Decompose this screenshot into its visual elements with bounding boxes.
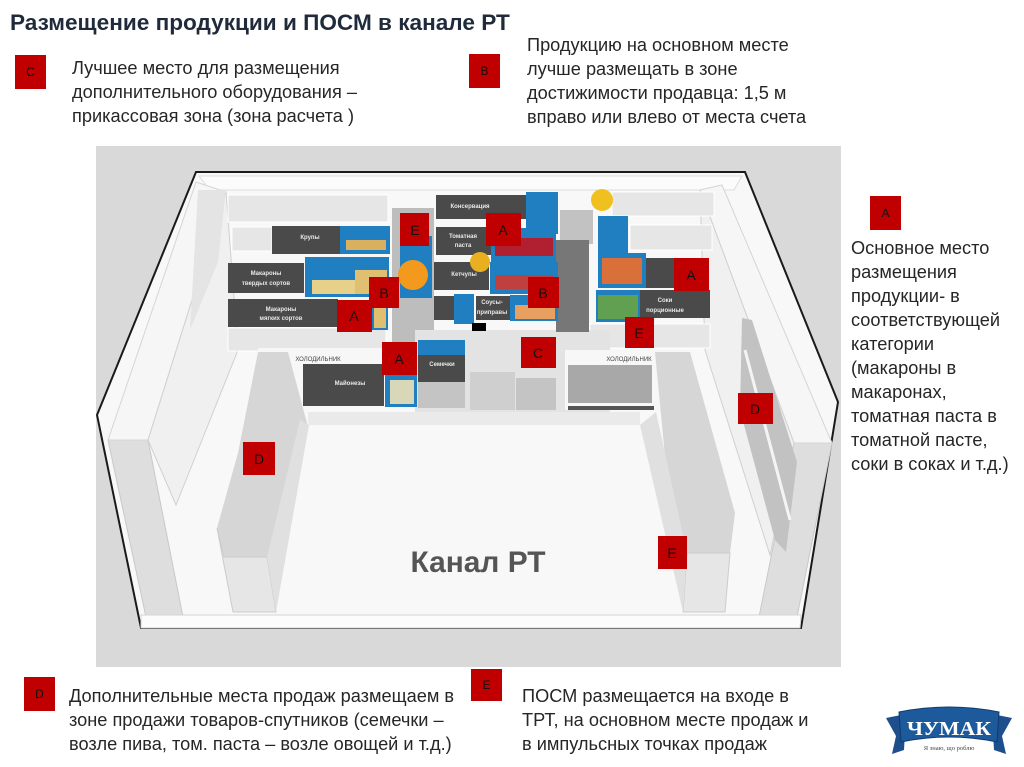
text block: A: томатная паста в: [851, 406, 997, 426]
room floor: [97, 172, 838, 628]
grey backdrop: [96, 146, 841, 667]
legend badge C: C: [26, 65, 35, 79]
text block: B: достижимости продавца: 1,5 м: [527, 83, 786, 103]
blue product displays: [305, 192, 646, 407]
text block: E: в импульсных точках продаж: [522, 734, 767, 754]
text block: C: [72, 58, 357, 126]
shelf labels: Консервация: [450, 204, 490, 210]
zone markers: D: [750, 401, 760, 417]
dark category shelves: [228, 195, 710, 406]
shelf labels: Макароны: [251, 271, 281, 277]
shelf labels: Соусы-: [481, 300, 503, 306]
gondola end units: [217, 352, 735, 612]
product colours on displays: [312, 189, 642, 404]
text block: B: [527, 35, 806, 127]
shelf labels: Кетчупы: [451, 272, 477, 278]
text block: E: ПОСМ размещается на входе в: [522, 686, 789, 706]
zone markers: A: [498, 222, 508, 238]
text block: A: [851, 238, 1009, 474]
text block: B: вправо или влево от места счета: [527, 107, 806, 127]
zone markers: C: [533, 345, 543, 361]
text block: C: прикассовая зона (зона расчета ): [72, 106, 354, 126]
legend badge A: A: [881, 206, 890, 220]
shelf labels: приправы: [477, 310, 507, 316]
legend badge D: D: [35, 687, 44, 701]
zone markers: A: [686, 267, 696, 283]
zone markers: E: [410, 222, 420, 238]
zone markers: B: [379, 285, 389, 301]
zone markers: E: [634, 325, 644, 341]
shelf labels: порционные: [646, 308, 685, 314]
text block: A: соответствующей: [851, 310, 1000, 330]
shelf labels: ХОЛОДИЛЬНИК: [295, 357, 341, 363]
shelf labels: ХОЛОДИЛЬНИК: [606, 357, 652, 363]
text block: E: [522, 686, 808, 754]
zone markers: [243, 213, 773, 569]
text block: A: томатной пасте,: [851, 430, 988, 450]
zone markers: D: [254, 451, 264, 467]
counter island: [258, 208, 690, 412]
back bottle shelves: [228, 192, 714, 351]
zone markers: E: [667, 545, 677, 561]
shelf labels: твердых сортов: [242, 281, 290, 287]
shelf labels: Крупы: [300, 235, 320, 241]
shelf labels: Семечки: [429, 362, 455, 368]
text block: A: продукции- в: [851, 286, 960, 306]
shelf labels: Соки: [658, 298, 673, 304]
floor label: Канал РТ: [410, 546, 546, 579]
text block: D: зоне продажи товаров-спутников (семечки –: [69, 710, 444, 730]
text block: D: Дополнительные места продаж размещаем в: [69, 686, 454, 706]
legend badge E: [471, 669, 502, 701]
title: Размещение продукции и ПОСМ в канале РТ: [10, 10, 510, 35]
legend badge C: [15, 55, 46, 89]
shelf labels: Томатная: [449, 234, 477, 240]
shelf labels: паста: [455, 243, 472, 249]
walls and shelving: [108, 176, 832, 628]
legend badge A: [870, 196, 901, 230]
zone markers: A: [394, 351, 404, 367]
shelf labels: Майонезы: [335, 380, 365, 387]
legend badge B: [469, 54, 500, 88]
text block: A: размещения: [851, 262, 957, 282]
shelf labels: Макароны: [266, 307, 296, 313]
text block: C: Лучшее место для размещения: [72, 58, 340, 78]
text block: C: дополнительного оборудования –: [72, 82, 357, 102]
text block: E: ТРТ, на основном месте продаж и: [522, 710, 808, 730]
shelf labels: мягких сортов: [260, 316, 303, 322]
zone markers: B: [538, 285, 548, 301]
legend badge E: E: [482, 678, 490, 692]
text block: A: соки в соках и т.д.): [851, 454, 1009, 474]
text block: B: Продукцию на основном месте: [527, 35, 789, 55]
text block: A: категории: [851, 334, 934, 354]
zone markers: A: [349, 308, 359, 324]
text block: B: лучше размещать в зоне: [527, 59, 738, 79]
logo: Chumak: Я знаю, що роблю: [924, 745, 974, 752]
text block: A: (макароны в: [851, 358, 956, 378]
text block: A: Основное место: [851, 238, 989, 258]
text block: D: возле пива, том. паста – возле овощей и т.д.): [69, 734, 452, 754]
legend badge B: B: [480, 64, 488, 78]
text block: A: макаронах,: [851, 382, 947, 402]
legend badge D: [24, 677, 55, 711]
shelf labels: [242, 204, 685, 387]
logo: Chumak: [886, 706, 1012, 754]
text block: D: [69, 686, 454, 754]
logo: Chumak: ЧУМАК: [907, 718, 992, 740]
